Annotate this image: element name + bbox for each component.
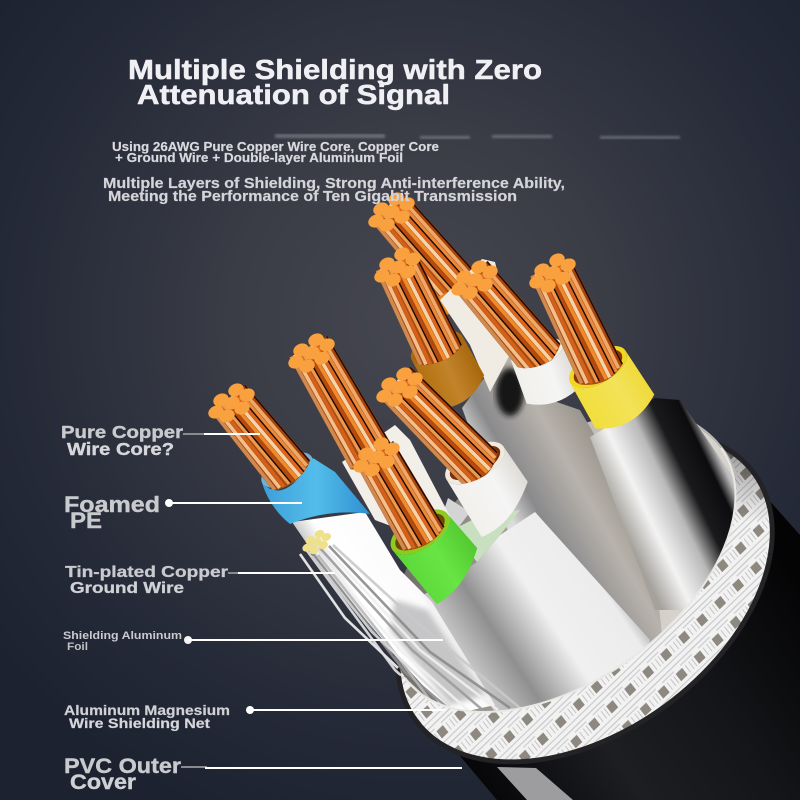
blue core white foil [292, 512, 495, 715]
white rear tube [440, 259, 515, 392]
title [128, 54, 542, 110]
conductor: brown core [372, 245, 491, 414]
conductor: rear left white core [286, 331, 452, 545]
description: materials [112, 139, 439, 165]
yellow core foil tube [590, 398, 735, 610]
blue jacket body [262, 458, 370, 524]
white core foil tube [420, 512, 650, 720]
ground wire strands [300, 545, 520, 714]
description: materials: Using 26AWG Pure Copper Wire Core, Copper Core [112, 139, 439, 154]
title: Multiple Shielding with Zero [128, 54, 542, 85]
outer PVC cover [413, 462, 800, 800]
small braid patch [445, 498, 468, 527]
green tinted white foil fold [459, 510, 520, 562]
label: shielding aluminum foil: Shielding Aluminum [63, 630, 182, 642]
conductor: yellow core [527, 251, 660, 438]
conductor: rear white core [449, 258, 583, 412]
label: foamed PE: Foamed [64, 492, 160, 517]
label: tin-plated copper ground wire [65, 564, 335, 597]
description: shielding [103, 176, 565, 205]
foil fold shading [390, 600, 485, 705]
rear silver foil tube [462, 356, 662, 643]
label: aluminum magnesium wire shielding net [64, 703, 445, 731]
label: PVC outer cover: PVC Outer [64, 755, 181, 778]
label: shielding aluminum foil [63, 630, 443, 653]
label: aluminum magnesium wire shielding net: Aluminum Magnesium [64, 703, 230, 718]
description: materials: + Ground Wire + Double-layer Aluminum Foil [115, 150, 403, 165]
label: PVC outer cover [64, 755, 462, 794]
foil interior [336, 354, 790, 772]
label: shielding aluminum foil: Foil [67, 641, 88, 653]
conductor: white front core [374, 365, 541, 539]
conductor: rear orange core [366, 190, 494, 325]
label: pure copper wire core: Pure Copper [61, 422, 183, 442]
cable illustration [206, 190, 800, 800]
label: pure copper wire core: Wire Core? [67, 439, 174, 459]
label: tin-plated copper ground wire: Tin-plated Copper [65, 564, 228, 581]
label: foamed PE: PE [70, 508, 102, 533]
ground wire tin end [301, 528, 332, 556]
blurred smudge [275, 134, 680, 139]
rim of shield opening [405, 448, 735, 712]
label: PVC outer cover: Cover [70, 771, 136, 794]
label: foamed PE [64, 492, 302, 533]
dark fold near rear tube [496, 368, 524, 416]
label: tin-plated copper ground wire: Ground Wire [70, 580, 184, 597]
label: pure copper wire core [61, 422, 260, 459]
description: shielding: Multiple Layers of Shielding, Strong Anti-interference Ability, [103, 176, 565, 192]
conductor: blue core [206, 381, 370, 524]
title: Attenuation of Signal [137, 79, 450, 110]
conductor: green core [351, 435, 491, 609]
braided aluminum magnesium shield [332, 361, 800, 800]
description: shielding: Meeting the Performance of Ten Gigabit Transmission [108, 189, 517, 205]
label: aluminum magnesium wire shielding net: Wire Shielding Net [69, 716, 211, 731]
foil tubes [292, 350, 735, 720]
